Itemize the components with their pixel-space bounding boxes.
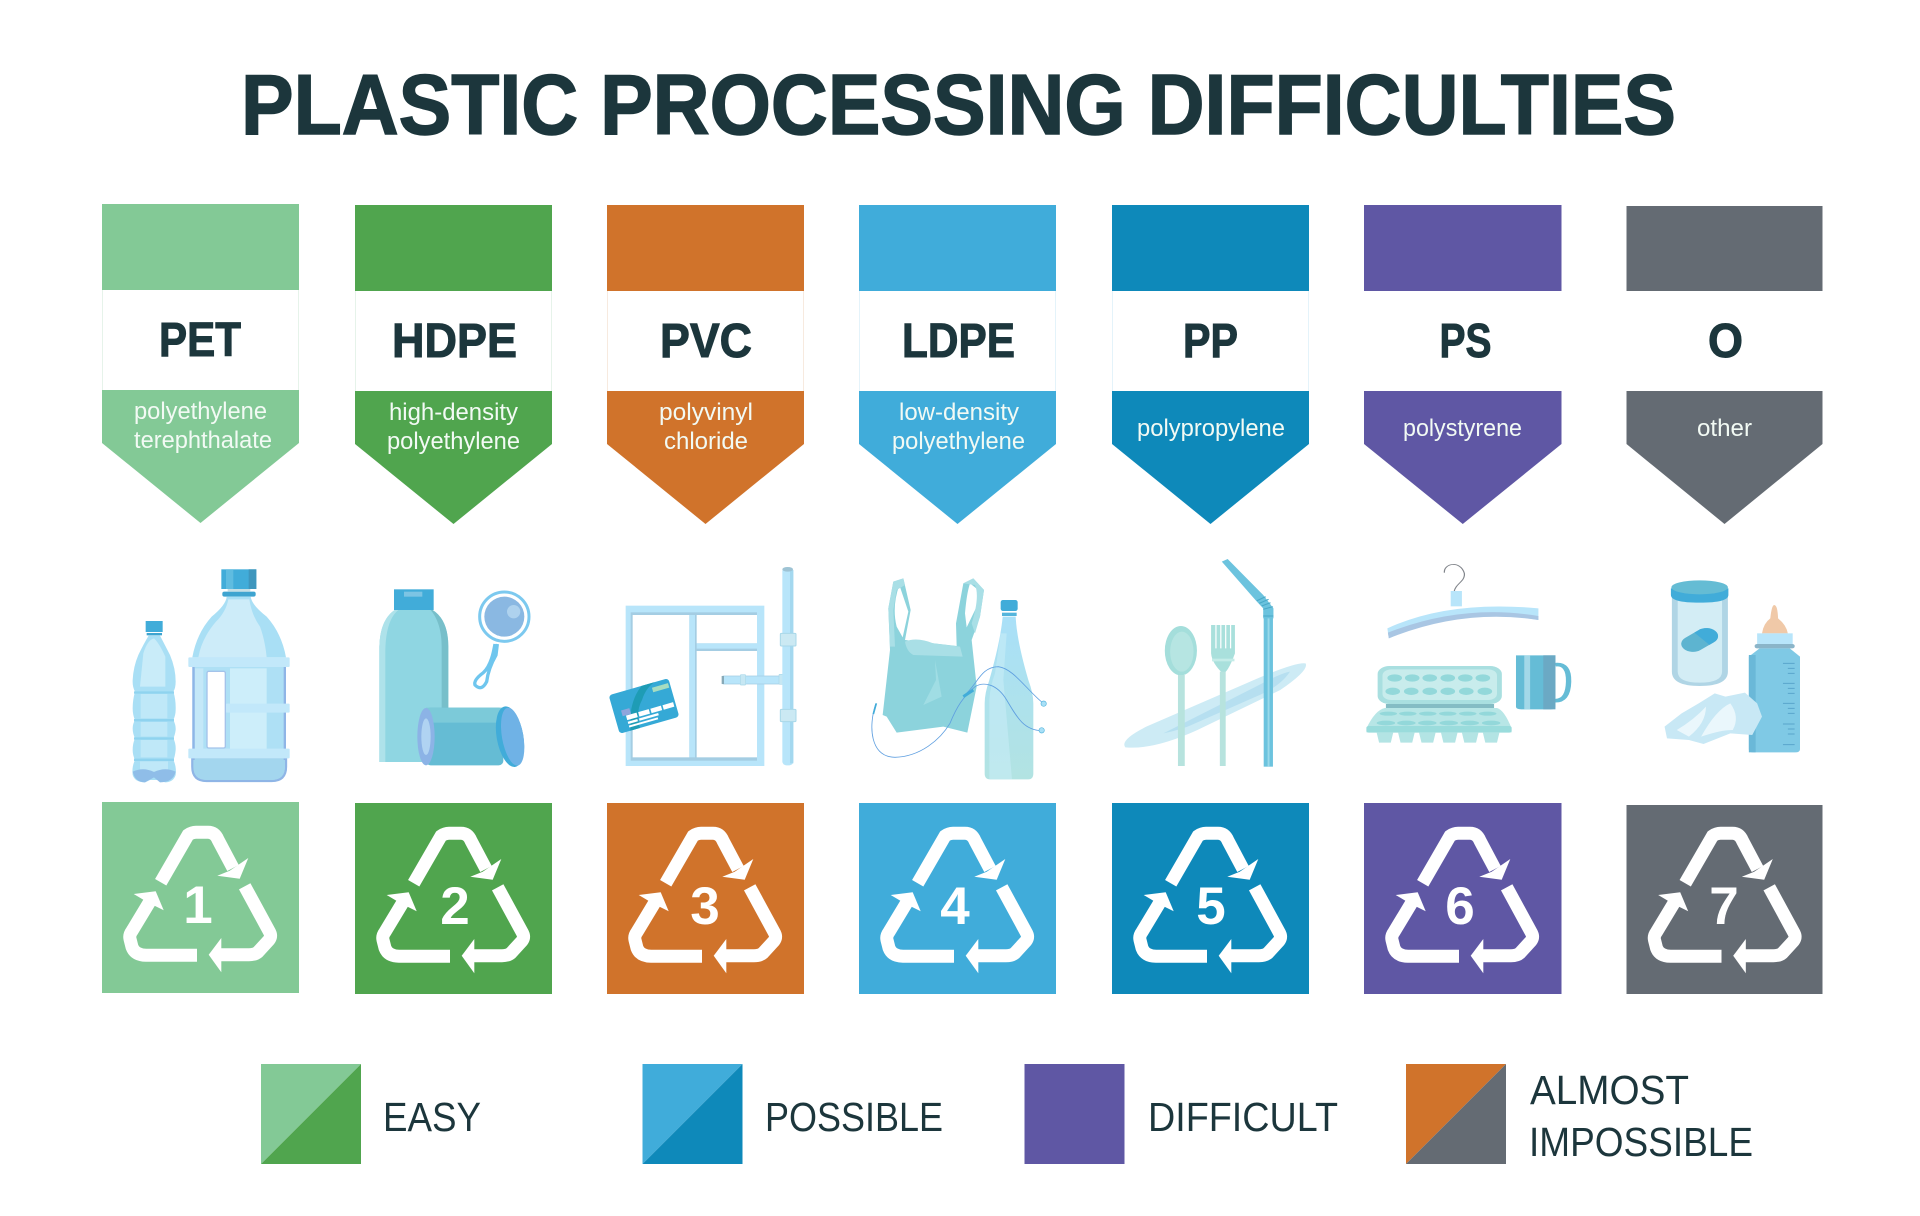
icon: recycling code 1 bbox=[102, 802, 299, 993]
panel: LDPE banner: polyethylene bbox=[892, 428, 1025, 455]
icon: other jar, baby bottle and tissue bbox=[1665, 580, 1800, 752]
icon: recycling code 7: 7 bbox=[1709, 877, 1739, 936]
icon: recycling code 2: 2 bbox=[440, 877, 470, 936]
panel: PET banner bbox=[102, 204, 299, 523]
panel: HDPE banner: polyethylene bbox=[387, 428, 520, 455]
icon: LDPE bag, bottle and earphones bbox=[872, 578, 1046, 779]
legend: possible: POSSIBLE bbox=[765, 1094, 943, 1140]
icon: recycling code 6: 6 bbox=[1445, 877, 1475, 936]
panel: PVC banner bbox=[607, 205, 804, 524]
panel: PS banner: PS bbox=[1440, 315, 1492, 368]
icon: recycling code 2 bbox=[355, 803, 552, 994]
icon: recycling code 5: 5 bbox=[1196, 877, 1226, 936]
panel: O banner: other bbox=[1697, 415, 1752, 442]
panel: LDPE banner bbox=[859, 205, 1056, 524]
panel: O banner: O bbox=[1708, 315, 1743, 368]
icon: PET bottles bbox=[132, 569, 290, 782]
legend: possible bbox=[642, 1064, 943, 1164]
icon: recycling code 4 bbox=[859, 803, 1056, 994]
panel: HDPE banner bbox=[355, 205, 552, 524]
icon: recycling code 3: 3 bbox=[690, 877, 720, 936]
icon: recycling code 6 bbox=[1364, 803, 1562, 994]
panel: PVC banner: polyvinyl bbox=[659, 399, 753, 426]
panel: O banner bbox=[1626, 206, 1822, 524]
panel: PP banner bbox=[1112, 205, 1309, 524]
icon: recycling code 7 bbox=[1626, 805, 1822, 994]
panel: PET banner: terephthalate bbox=[134, 427, 272, 454]
legend: difficult: DIFFICULT bbox=[1148, 1094, 1338, 1140]
panel: PET banner: PET bbox=[159, 314, 241, 367]
panel: PS banner: polystyrene bbox=[1403, 415, 1522, 442]
title: PLASTIC PROCESSING DIFFICULTIES bbox=[241, 58, 1676, 153]
legend: almost impossible: IMPOSSIBLE bbox=[1529, 1119, 1753, 1165]
icon: recycling code 3 bbox=[607, 803, 804, 994]
legend: almost impossible: ALMOST bbox=[1530, 1067, 1689, 1113]
legend: easy: EASY bbox=[383, 1094, 481, 1140]
panel: PVC banner: PVC bbox=[660, 315, 752, 368]
icon: HDPE shampoo bottle, rattle and container bbox=[379, 589, 529, 769]
panel: LDPE banner: LDPE bbox=[902, 315, 1015, 368]
panel: HDPE banner: HDPE bbox=[392, 315, 517, 368]
icon: PS hanger, egg tray and mug bbox=[1366, 564, 1569, 743]
icon: recycling code 1: 1 bbox=[183, 876, 213, 935]
icon: recycling code 4: 4 bbox=[940, 877, 970, 936]
panel: HDPE banner: high-density bbox=[389, 399, 518, 426]
legend: easy bbox=[261, 1064, 481, 1164]
panel: PP banner: polypropylene bbox=[1137, 415, 1285, 442]
panel: PP banner: PP bbox=[1183, 315, 1238, 368]
panel: PET banner: polyethylene bbox=[134, 398, 267, 425]
panel: LDPE banner: low-density bbox=[899, 399, 1019, 426]
icon: PP plate, spoon, fork and straw bbox=[1124, 559, 1306, 767]
legend: difficult bbox=[1024, 1064, 1338, 1164]
panel: PS banner bbox=[1364, 205, 1562, 524]
icon: PVC window frame, pipe and card bbox=[609, 567, 796, 766]
icon: recycling code 5 bbox=[1112, 803, 1309, 994]
legend: almost impossible bbox=[1406, 1064, 1753, 1165]
panel: PVC banner: chloride bbox=[664, 428, 748, 455]
